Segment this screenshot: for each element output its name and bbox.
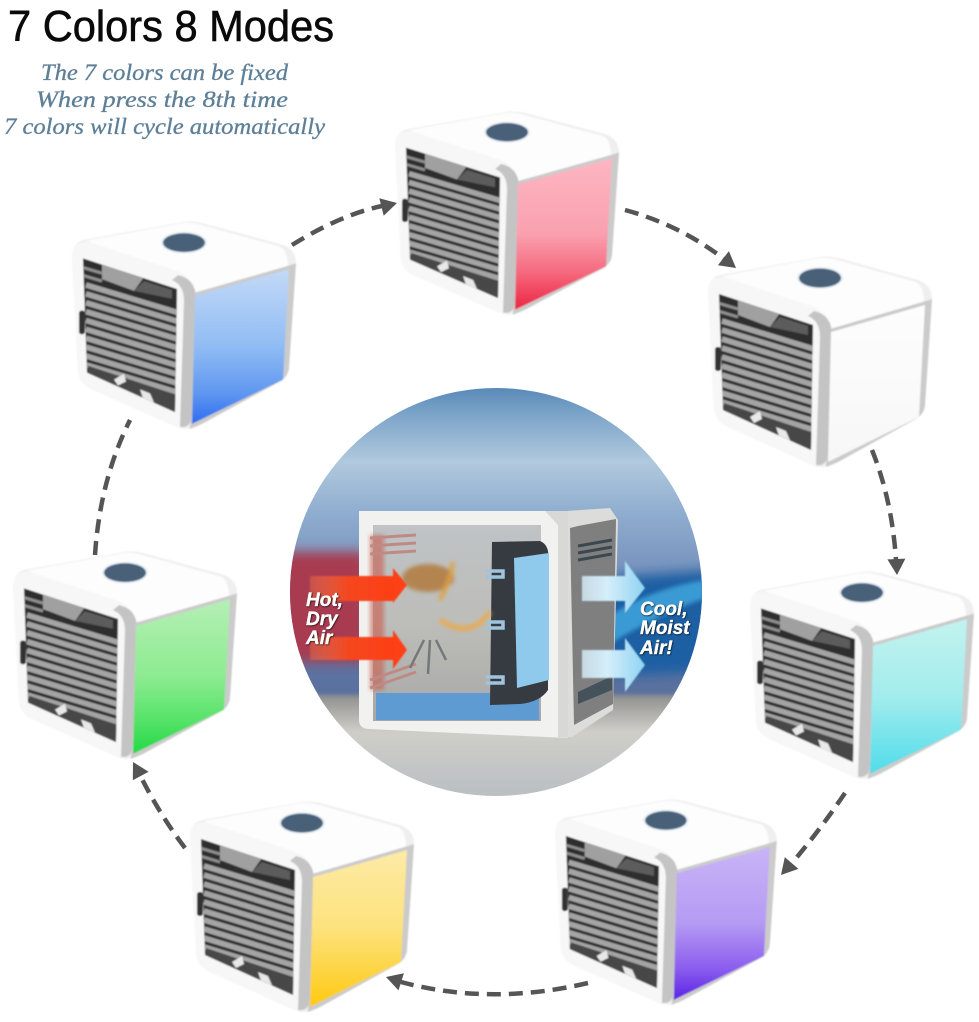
filter frame	[490, 541, 548, 705]
arrow: teal to purple	[781, 793, 845, 875]
subtitle text block	[4, 60, 326, 139]
subtitle text block: The 7 colors can be fixed	[41, 60, 289, 85]
label: hot dry air: Hot,	[306, 590, 343, 611]
intake grille	[370, 535, 416, 688]
cooler: yellow	[190, 802, 414, 1012]
subtitle text block: 7 colors will cycle automatically	[4, 114, 326, 139]
inner window	[373, 525, 541, 721]
background sky	[285, 385, 710, 705]
hot arrow top	[310, 568, 407, 603]
label: cool moist air: Cool,	[640, 599, 688, 620]
cooler: teal	[750, 571, 974, 779]
cooler: green	[13, 551, 237, 759]
label: hot dry air: Air	[305, 628, 334, 649]
cool arrow bottom	[582, 638, 645, 692]
label: hot dry air	[305, 590, 343, 649]
side panel	[566, 508, 618, 737]
arrow: red to white	[625, 210, 736, 268]
front frame	[359, 511, 568, 738]
label: hot dry air: Dry	[306, 609, 339, 630]
arrow: yellow to green	[133, 762, 185, 848]
center circle: airflow diagram	[276, 385, 715, 800]
arrow: blue to red	[292, 198, 397, 245]
title: 7 Colors 8 Modes	[8, 2, 334, 51]
cooler: white	[708, 256, 932, 467]
cool air haze	[606, 570, 715, 676]
arrow: green to blue	[95, 420, 130, 555]
fan and heat smear	[402, 562, 490, 628]
cooler: blue	[72, 221, 296, 429]
hot arrow bottom	[310, 630, 407, 669]
cooler: purple	[555, 799, 777, 1005]
floor	[318, 693, 674, 796]
cooler: red	[395, 111, 619, 315]
label: cool moist air: Moist	[640, 618, 690, 639]
intake glow	[370, 535, 384, 690]
arrow: white to teal	[872, 450, 905, 575]
subtitle text block: When press the 8th time	[36, 87, 288, 112]
arrow: purple to yellow	[386, 973, 588, 994]
hot air haze	[290, 543, 359, 670]
cool arrow top	[582, 561, 645, 613]
label: cool moist air	[639, 599, 690, 659]
pegs	[486, 571, 503, 683]
label: cool moist air: Air!	[639, 638, 673, 659]
